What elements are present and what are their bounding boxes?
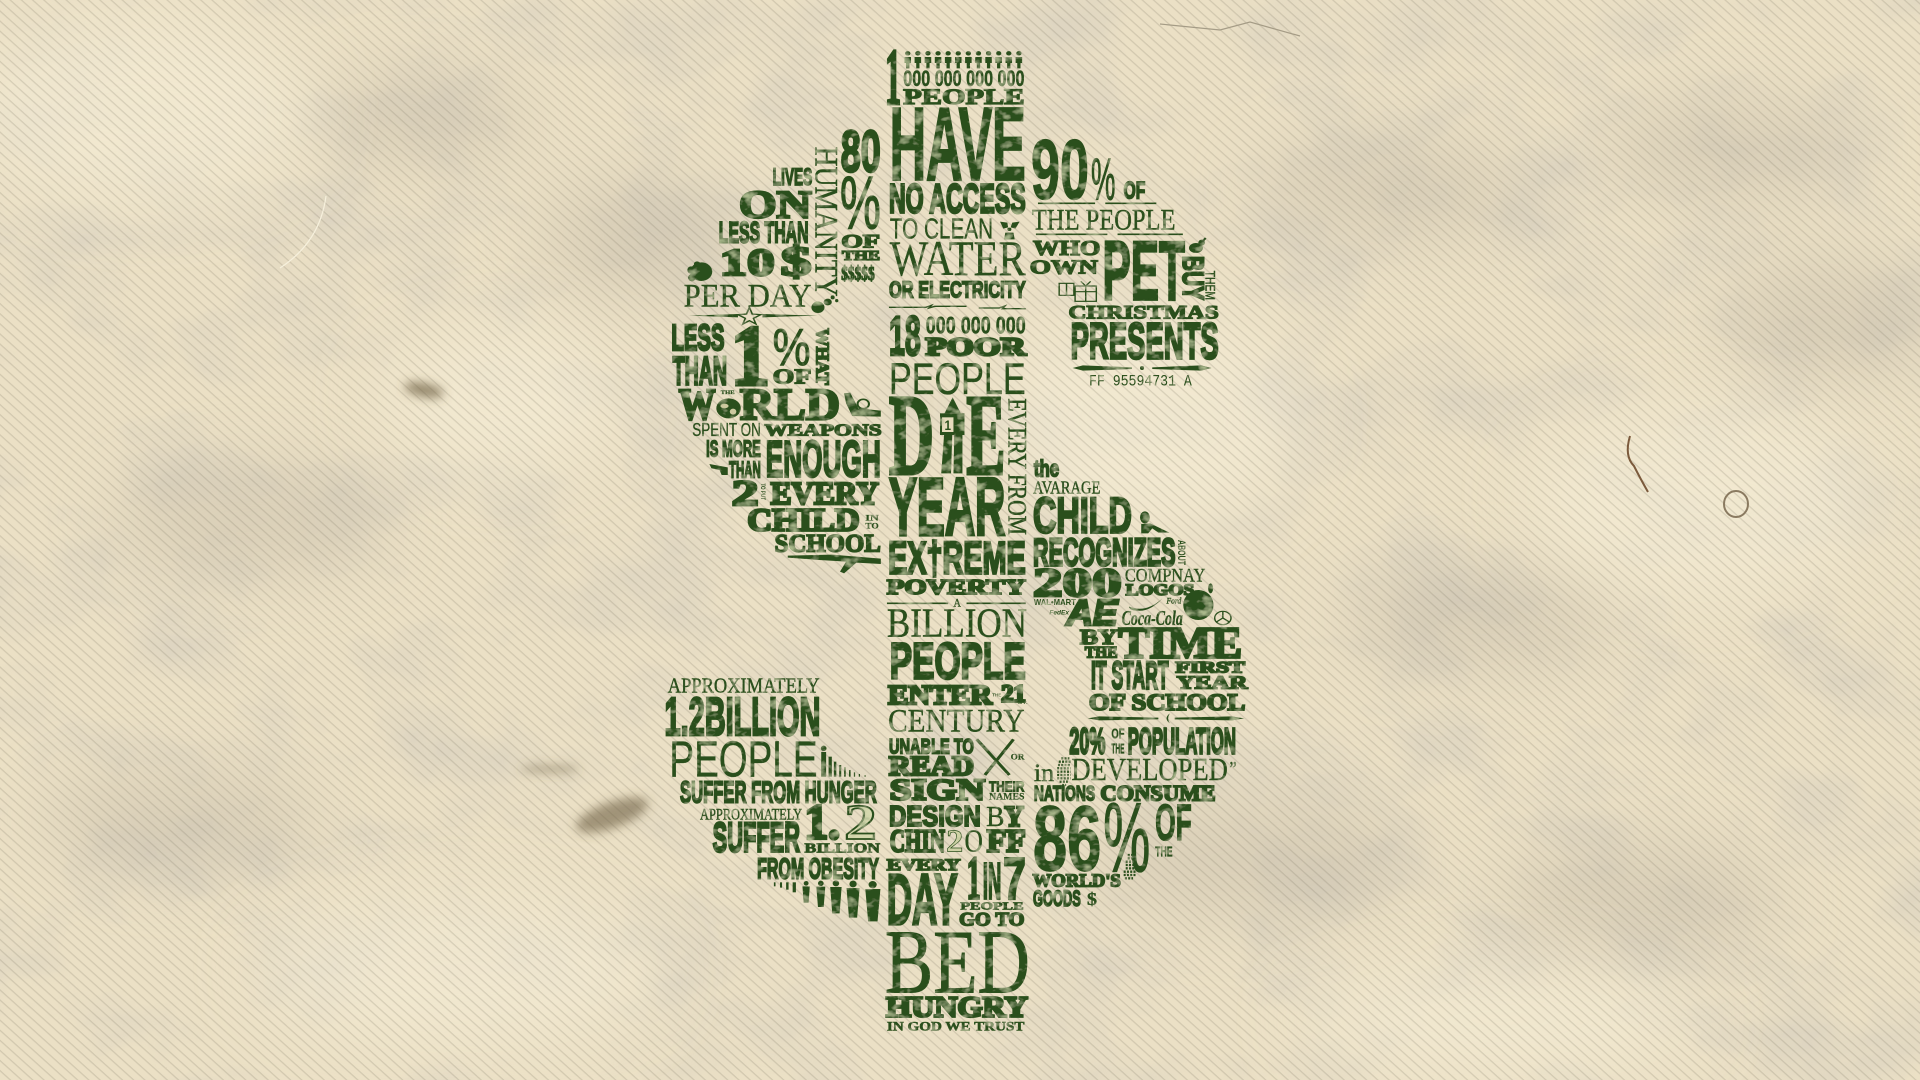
statement: by the time it start first year of school: IT START [1091,654,1169,697]
icon: hooded figure holding number sign: 1 [944,418,951,434]
statement: approximately 1.2 billion suffer from obesity: 2 [844,794,877,849]
statement: 20% of the population in developed nations consume 86% of the world's goods: OF [1111,726,1124,742]
statement: 90% of the people who own pet buy them christmas presents: THE PEOPLE [1032,203,1176,236]
infographic canvas: POPULATION [1128,720,1236,761]
icon: cross mark [977,739,1013,775]
statement: the average child recognizes about 200 company logos: COMPNAY [1125,565,1205,586]
brand logos cluster: Ford [1166,596,1181,606]
dollar sign made of typography: % [840,160,881,244]
statement: a billion people enter the 21st century unable to read or sign their names: UNABLE TO [889,735,974,759]
statement: 18 billion poor people die every year from extreme poverty: D [889,371,934,498]
statement: 20% of the population in developed nations consume 86% of the world's goods: 86 [1033,787,1101,890]
statement: less than 1% of what the world spent on weapons is more than enough to put every child into school: TO [865,521,879,530]
statement: less than 1% of what the world spent on weapons is more than enough to put every child into school: TO PUT [759,483,766,500]
statement: 18 billion poor people die every year from extreme poverty [887,306,1030,599]
statement: every day 1 in 7 people go to bed hungry: DAY [887,860,958,939]
statement: less than 1% of what the world spent on weapons is more than enough to put every child into school: THAN [673,349,727,393]
statement: by the time it start first year of school: OF SCHOOL [1089,689,1245,715]
brand logos cluster [1034,583,1231,633]
statement: by the time it start first year of school [1080,618,1248,715]
statement: 90% of the people who own pet buy them christmas presents: % [1091,147,1116,213]
statement: a billion people enter the 21st century unable to read or sign their names: SIGN [890,773,985,806]
icon: handgun [844,393,881,417]
statement: 18 billion poor people die every year from extreme poverty: POVERTY [887,576,1026,599]
statement: every day 1 in 7 people go to bed hungry: IN [983,854,1001,910]
statement: less than 1% of what the world spent on weapons is more than enough to put every child into school: OF [773,365,811,389]
statement: a billion people enter the 21st century unable to read or sign their names: THEIR [989,779,1025,795]
statement: approximately 1.2 billion suffer from obesity: SUFFER [713,813,800,861]
credit: design by chin2 off: CHIN [890,823,945,859]
statement: 80% of humanity lives on less than 10$ per day: 10 [720,242,775,284]
statement: 20% of the population in developed nations consume 86% of the world's goods: % [1103,783,1150,893]
statement: 20% of the population in developed nations consume 86% of the world's goods: NATIONS [1034,782,1095,806]
statement: 90% of the people who own pet buy them christmas presents: PET [1102,223,1185,317]
dollar sign made of typography: NO ACCESS [889,176,1026,221]
statement: approximately 1.2 billion suffer from obesity [700,794,880,921]
statement: less than 1% of what the world spent on weapons is more than enough to put every child into school: 1 [731,308,770,403]
statement: 80% of humanity lives on less than 10$ per day: $$$$$ [841,262,875,284]
icon: growing people [774,880,880,921]
statement: every day 1 in 7 people go to bed hungry: GO TO [959,909,1024,930]
statement: 80% of humanity lives on less than 10$ per day: ON [739,182,812,226]
icon: gift boxes [1059,281,1096,301]
statement: approximately 1.2 billion people suffer from hunger: 1.2BILLION [664,687,820,747]
statement: by the time it start first year of school: THE [1085,644,1118,661]
statement: the average child recognizes about 200 company logos: RECOGNIZES [1033,532,1176,575]
brand logos cluster: Coca-Cola [1122,606,1183,629]
dollar sign made of typography: PRESENTS [1071,314,1219,370]
statement: one trillion people have no access to clean water or electricity: 000 000 000 000 [903,66,1024,91]
statement: one trillion people have no access to clean water or electricity: WATER [890,231,1026,286]
statement: the average child recognizes about 200 company logos: 200 [1033,560,1122,605]
statement: a billion people enter the 21st century unable to read or sign their names: OR [1011,752,1025,761]
statement: approximately 1.2 billion people suffer from hunger: PEOPLE [669,732,818,788]
statement: 20% of the population in developed nations consume 86% of the world's goods: CONSUME [1100,782,1216,806]
statement: 20% of the population in developed nations consume 86% of the world's goods: THE [1155,844,1173,860]
statement: one trillion people have no access to clean water or electricity: OR ELECTRICITY [889,276,1026,303]
statement: 20% of the population in developed nations consume 86% of the world's goods: DEVELOPED [1071,751,1228,787]
statement: by the time it start first year of school: TIME [1118,618,1242,667]
icon: crawling baby [1140,511,1169,533]
statement: the average child recognizes about 200 company logos: CHILD [1033,488,1132,543]
statement: less than 1% of what the world spent on weapons is more than enough to put every child into school: % [773,319,811,377]
statement: less than 1% of what the world spent on weapons is more than enough to put every child into school: RLD [740,380,840,429]
credit: design by chin2 off [889,800,1026,859]
statement: less than 1% of what the world spent on weapons is more than enough to put every child into school: THAN [729,458,761,483]
statement: 90% of the people who own pet buy them christmas presents: BUY [1176,256,1209,300]
statement: approximately 1.2 billion suffer from obesity: 1. [804,794,840,849]
statement: one trillion people have no access to clean water or electricity: 1 [885,33,901,122]
statement: one trillion people have no access to clean water or electricity: PEOPLE [903,85,1024,109]
statement: 80% of humanity lives on less than 10$ per day: LIVES [773,164,812,190]
icon: hooded figure holding number sign [940,397,964,473]
statement: a billion people enter the 21st century unable to read or sign their names [887,596,1028,806]
icon: dot strip [1124,855,1136,878]
statement: less than 1% of what the world spent on weapons is more than enough to put every child into school: IS MORE [706,435,761,462]
statement: approximately 1.2 billion suffer from obesity: BILLION [804,842,880,856]
statement: 90% of the people who own pet buy them christmas presents: THEM [1202,271,1217,300]
statement: 18 billion poor people die every year from extreme poverty: PEOPLE [889,354,1026,404]
statement: a billion people enter the 21st century unable to read or sign their names: NAMES [989,792,1025,802]
statement: approximately 1.2 billion people suffer from hunger [664,675,877,810]
statement: a billion people enter the 21st century unable to read or sign their names: THE [992,693,1002,698]
divider with crescent [1088,713,1244,723]
statement: 20% of the population in developed nations consume 86% of the world's goods: in [1034,760,1054,787]
divider with dot [1073,365,1211,371]
statement: less than 1% of what the world spent on weapons is more than enough to put every child into school: EVERY [771,475,879,511]
brand logos cluster: FedEx [1049,608,1070,616]
credit: design by chin2 off: Y [1004,801,1024,832]
statement: 20% of the population in developed nations consume 86% of the world's goods: $ [1087,890,1097,909]
statement: 80% of humanity lives on less than 10$ per day: $ [781,239,811,285]
statement: a billion people enter the 21st century unable to read or sign their names: 21 [1001,680,1026,707]
statement: every day 1 in 7 people go to bed hungry: 1 [967,844,981,912]
statement: a billion people enter the 21st century unable to read or sign their names: READ [889,751,974,781]
statement: 18 billion poor people die every year from extreme poverty: 18 [889,306,921,368]
statement: less than 1% of what the world spent on weapons is more than enough to put every child into school: W [679,380,716,429]
statement: the average child recognizes about 200 company logos: AVARAGE [1033,478,1100,498]
statement: every day 1 in 7 people go to bed hungry [885,844,1030,1034]
statement: by the time it start first year of school: BY [1080,626,1118,649]
statement: the average child recognizes about 200 company logos: LOGOS [1126,582,1194,599]
statement: every day 1 in 7 people go to bed hungry: HUNGRY [886,992,1028,1024]
credit: design by chin2 off: FF [987,823,1026,859]
dollar sign made of typography: ENOUGH [766,432,881,488]
divider with star [689,307,818,324]
statement: every day 1 in 7 people go to bed hungry: EVERY [887,857,961,874]
statement: 80% of humanity lives on less than 10$ per day: HUMANITY [808,147,843,297]
credit: design by chin2 off: 2 [946,823,963,859]
icon: row of people [904,53,1026,65]
dollar sign made of typography: SUFFER FROM HUNGER [680,776,877,810]
statement: less than 1% of what the world spent on weapons is more than enough to put every child into school [671,308,882,573]
statement: every day 1 in 7 people go to bed hungry: PEOPLE [960,899,1024,912]
statement: a billion people enter the 21st century unable to read or sign their names: ENTER [888,680,993,710]
statement: the average child recognizes about 200 company logos [1033,457,1231,633]
statement: by the time it start first year of school: YEAR [1177,673,1248,693]
statement: approximately 1.2 billion people suffer from hunger: APPROXIMATELY [668,675,820,698]
statement: less than 1% of what the world spent on weapons is more than enough to put every child into school: LESS [671,317,724,358]
statement: 90% of the people who own pet buy them christmas presents: 90 [1031,122,1089,217]
statement: a billion people enter the 21st century unable to read or sign their names: BILLION [887,601,1027,647]
statement: less than 1% of what the world spent on weapons is more than enough to put every child into school: 2 [732,473,758,513]
statement: by the time it start first year of school: FIRST [1176,659,1246,676]
statement: less than 1% of what the world spent on weapons is more than enough to put every child into school: IN [865,514,880,522]
statement: 90% of the people who own pet buy them christmas presents: FF 95594731 A [1089,373,1192,391]
icon: radiation [1000,222,1020,239]
statement: less than 1% of what the world spent on weapons is more than enough to put every child into school: THE [721,390,735,396]
statement: 18 billion poor people die every year from extreme poverty: EVERY FROM [1002,398,1030,535]
icon: globe [716,398,741,418]
statement: less than 1% of what the world spent on weapons is more than enough to put every child into school: CHILD [747,502,860,538]
statement: 20% of the population in developed nations consume 86% of the world's goods: OF [1155,795,1192,852]
icon: candies [687,261,712,281]
statement: 20% of the population in developed nations consume 86% of the world's goods: ” [1229,757,1237,779]
icon: assault rifle [788,555,881,573]
statement: 80% of humanity lives on less than 10$ per day: OF [841,230,880,252]
dollar sign made of typography: HAVE [890,87,1026,202]
statement: every day 1 in 7 people go to bed hungry: 7 [1003,846,1026,911]
statement: less than 1% of what the world spent on weapons is more than enough to put every child into school: WHAT [812,328,831,385]
icon: pistol [709,464,728,475]
brand logos cluster: WAL•MART [1034,598,1076,607]
statement: 90% of the people who own pet buy them christmas presents [1030,122,1219,391]
statement: less than 1% of what the world spent on weapons is more than enough to put every child into school: SCHOOL [775,530,881,558]
icon: shrinking people [821,746,866,777]
statement: 80% of humanity lives on less than 10$ per day: PER DAY [684,277,811,314]
statement: less than 1% of what the world spent on weapons is more than enough to put every child into school: WEAPONS [764,421,882,440]
statement: 20% of the population in developed nations consume 86% of the world's goods [1033,720,1237,911]
statement: one trillion people have no access to clean water or electricity [885,33,1026,303]
statement: 20% of the population in developed nations consume 86% of the world's goods: 20% [1069,720,1105,761]
statement: 18 billion poor people die every year from extreme poverty: E [967,371,1005,498]
statement: a billion people enter the 21st century unable to read or sign their names: CENTURY [888,702,1024,739]
statement: 80% of humanity lives on less than 10$ per day: 80 [841,119,881,184]
statement: 20% of the population in developed nations consume 86% of the world's goods: GOODS [1033,886,1081,911]
statement: 18 billion poor people die every year from extreme poverty: EX†REME [888,532,1026,583]
statement: 90% of the people who own pet buy them christmas presents: WHO [1033,237,1100,260]
statement: 20% of the population in developed nations consume 86% of the world's goods: WORLD'S [1033,871,1121,891]
credit: design by chin2 off: B [986,801,1004,832]
icon: rabbit [1189,237,1207,253]
credit: design by chin2 off: O [964,823,983,859]
dollar sign made of typography [664,33,1248,1034]
statement: a billion people enter the 21st century unable to read or sign their names: PEOPLE [890,634,1026,690]
statement: 90% of the people who own pet buy them christmas presents: CHRISTMAS [1069,301,1219,323]
statement: a billion people enter the 21st century unable to read or sign their names: ST. [1018,700,1028,706]
brand logos cluster: AE [1066,592,1119,633]
statement: 80% of humanity lives on less than 10$ per day: LESS THAN [719,216,809,249]
statement: the average child recognizes about 200 company logos: the [1034,457,1059,482]
statement: 18 billion poor people die every year from extreme poverty: YEAR [889,462,1005,553]
statement: 18 billion poor people die every year from extreme poverty: 000 000 000 [926,312,1026,339]
statement: 80% of humanity lives on less than 10$ per day [684,119,881,324]
paper stains and creases [280,22,1748,840]
credit: design by chin2 off: DESIGN [889,800,981,832]
statement: 90% of the people who own pet buy them christmas presents: OF [1124,177,1145,204]
statement: 90% of the people who own pet buy them christmas presents: OWN [1030,255,1099,278]
statement: every day 1 in 7 people go to bed hungry: BED [885,912,1030,1012]
icon: dot grid [1057,758,1071,785]
statement: the average child recognizes about 200 company logos: ABOUT [1175,540,1187,565]
statement: approximately 1.2 billion suffer from obesity: APPROXIMATELY [700,806,802,823]
dollar sign made of typography: FROM OBESITY [757,852,879,885]
icon: candies small [811,295,838,313]
statement: less than 1% of what the world spent on weapons is more than enough to put every child into school: SPENT ON [692,420,761,440]
statement: 20% of the population in developed nations consume 86% of the world's goods: THE [1111,741,1125,757]
statement: every day 1 in 7 people go to bed hungry: IN GOD WE TRUST [887,1020,1025,1034]
statement: 80% of humanity lives on less than 10$ per day: THE [842,248,880,264]
statement: a billion people enter the 21st century unable to read or sign their names: A [953,596,961,609]
statement: one trillion people have no access to clean water or electricity: TO CLEAN [890,212,993,245]
statement: 18 billion poor people die every year from extreme poverty: POOR [926,334,1026,361]
